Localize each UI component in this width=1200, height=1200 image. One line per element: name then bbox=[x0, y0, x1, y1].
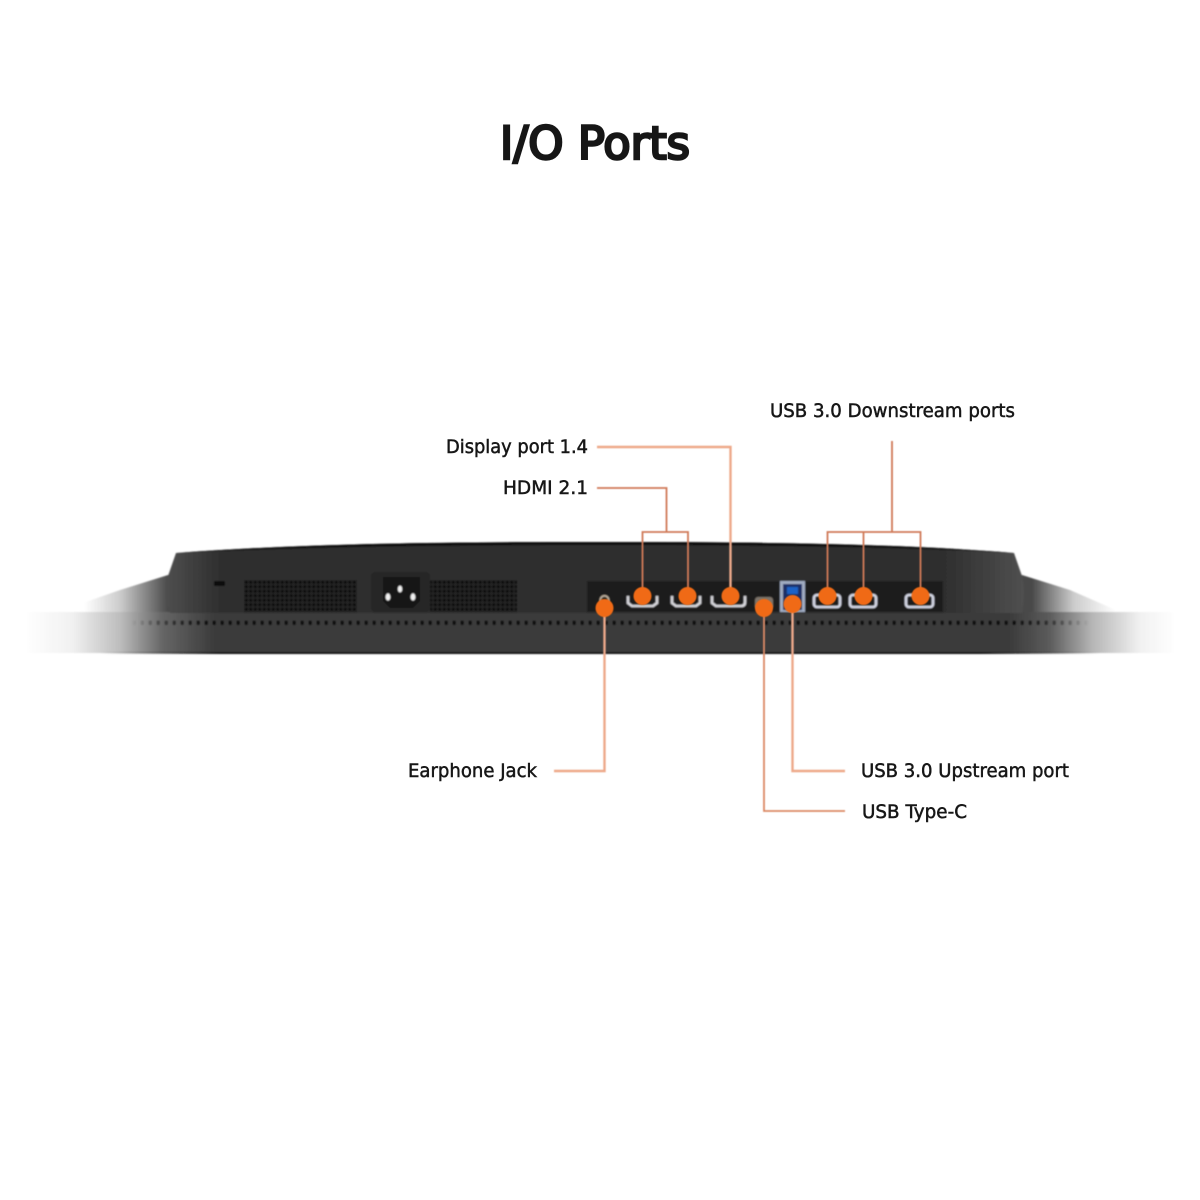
title: I/O Ports bbox=[500, 117, 690, 170]
leader: USB upstream bbox=[792, 600, 845, 771]
kensington lock slot bbox=[214, 581, 225, 586]
USB downstream port 2 bbox=[850, 595, 876, 607]
leader: USB Type-C bbox=[764, 610, 845, 811]
leader: display port bbox=[597, 447, 730, 596]
DisplayPort bbox=[712, 596, 745, 606]
USB downstream port 3 bbox=[906, 595, 933, 607]
label: Display port 1.4: Display port 1.4 bbox=[446, 436, 588, 458]
leader lines bbox=[554, 441, 920, 811]
USB downstream port 1 bbox=[814, 595, 840, 607]
top edge highlight bbox=[176, 542, 1014, 553]
USB upstream port bbox=[780, 581, 805, 612]
HDMI port 1 bbox=[628, 596, 657, 606]
monitor lower band bbox=[15, 612, 1185, 653]
leader: USB downstream bbox=[828, 441, 920, 596]
label: USB Type-C: USB Type-C bbox=[862, 801, 967, 823]
power socket bbox=[371, 572, 430, 612]
label: USB 3.0 Downstream ports: USB 3.0 Downstream ports bbox=[770, 400, 1015, 422]
USB-C port bbox=[755, 597, 773, 609]
HDMI port 2 bbox=[672, 596, 700, 606]
monitor back shell fading at the sides bbox=[80, 575, 1125, 625]
vent perforation row bbox=[134, 620, 1086, 626]
leader: earphone jack bbox=[554, 610, 604, 771]
right speaker grille bbox=[430, 580, 517, 612]
orange port markers bbox=[596, 587, 930, 617]
label: HDMI 2.1: HDMI 2.1 bbox=[503, 477, 588, 499]
monitor rear bottom edge bbox=[15, 542, 1185, 654]
left speaker grille bbox=[244, 580, 357, 612]
leader: HDMI bbox=[597, 488, 688, 596]
label: Earphone Jack: Earphone Jack bbox=[408, 760, 537, 782]
earphone jack ring bbox=[600, 596, 609, 604]
I/O port recess bbox=[587, 581, 943, 612]
label: USB 3.0 Upstream port: USB 3.0 Upstream port bbox=[861, 760, 1069, 782]
monitor centre housing bbox=[165, 542, 1024, 613]
